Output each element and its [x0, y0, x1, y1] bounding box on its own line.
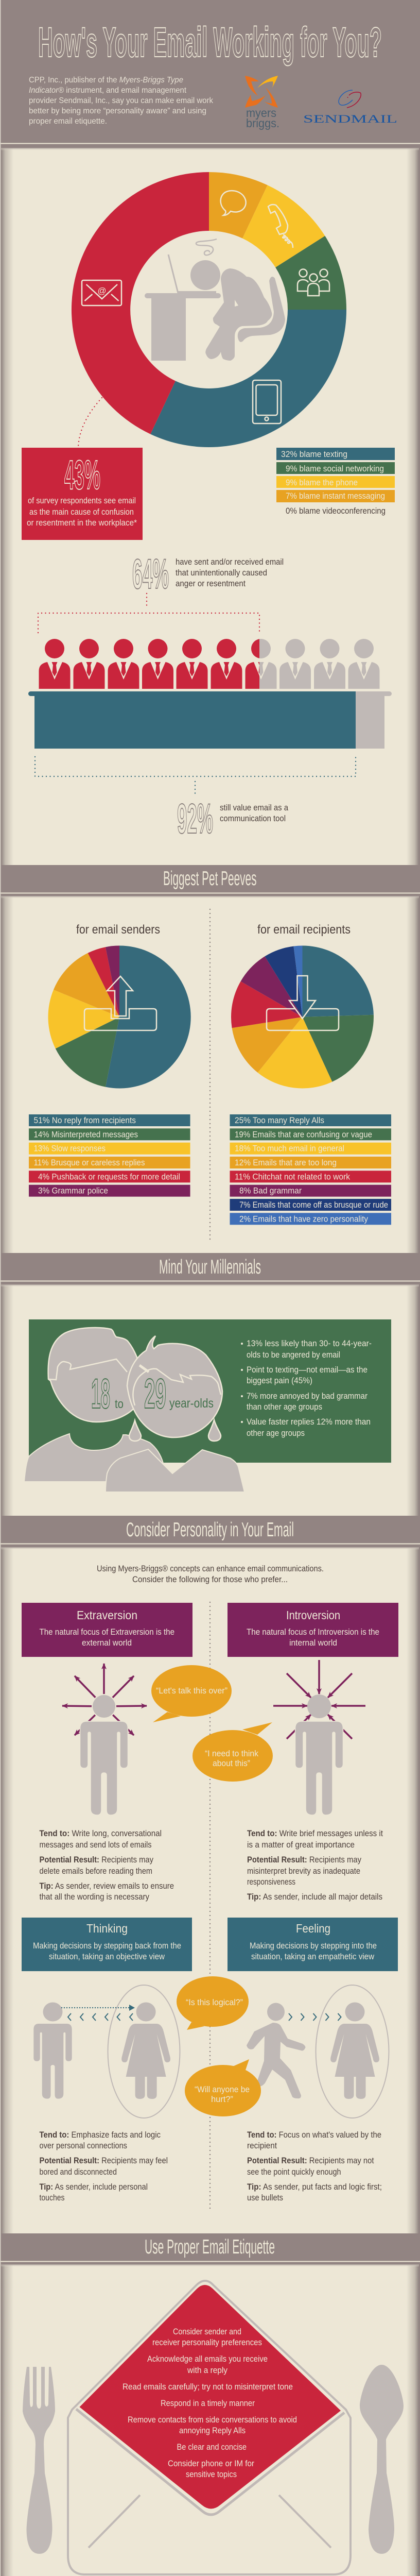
card: feeling: Feeling [296, 1922, 330, 1935]
intro text: CPP, Inc., publisher of the Myers-Briggs Type [29, 76, 183, 84]
text: introversion details [247, 1828, 383, 1902]
donut chart [72, 172, 346, 447]
diamond: etiquette tips: Respond in a timely manner [161, 2398, 255, 2408]
legend: what respondents blame [276, 448, 395, 516]
stat: 64%: that unintentionally caused [176, 568, 267, 578]
text: feeling details: recipient [247, 2141, 277, 2150]
legend: senders: 11% Brusque or careless replies [34, 1158, 145, 1167]
text: thinking details: touches [39, 2193, 65, 2202]
row of ten people pictogram [39, 639, 380, 689]
text: feeling details: Tend to: Focus on what's valued by the [247, 2130, 381, 2140]
text: extraversion details: messages and send lots of emails [39, 1840, 151, 1850]
legend: recipients: 11% Chitchat not related to work [235, 1172, 350, 1181]
speech bubble: let's talk this over [151, 1665, 232, 1722]
text: introversion details: Potential Result: Recipients may [247, 1855, 361, 1865]
label: 18 to 29 year-olds: 29 [144, 1370, 166, 1417]
diamond: etiquette tips: Remove contacts from side conversations to avoid [128, 2415, 297, 2425]
intro text: better by being more “personality aware” and using [29, 107, 206, 115]
legend: senders: 51% No reply from recipients [34, 1115, 136, 1125]
legend: senders: 13% Slow responses [34, 1144, 106, 1154]
icon: envelope [68, 2281, 351, 2574]
icon: envelope: @ [97, 286, 107, 296]
speech bubble: will anyone be hurt: hurt?” [211, 2094, 233, 2104]
callout: 43% box: or resentment in the workplace* [27, 518, 137, 528]
text: feeling details: see the point quickly enough [247, 2167, 341, 2177]
speech bubble: will anyone be hurt [185, 2059, 261, 2116]
legend: recipients: 2% Emails that have zero personality [239, 1214, 368, 1224]
card: introversion [227, 1603, 398, 1657]
figure: extravert with outward arrows [62, 1664, 147, 1815]
text: extraversion details: Potential Result: Recipients may [39, 1855, 153, 1865]
label: 18 to 29 year-olds: to [115, 1397, 124, 1411]
speech bubble: I need to think about this [192, 1722, 273, 1782]
stat: 64%: have sent and/or received email [176, 557, 284, 567]
diamond: etiquette tips: annoying Reply Alls [179, 2426, 246, 2435]
icon: download arrow and tray [267, 976, 339, 1030]
pie chart: recipients [231, 946, 374, 1088]
text: thinking details: Tend to: Emphasize facts and logic [39, 2130, 161, 2140]
diamond: etiquette tips: with a reply [187, 2365, 227, 2375]
text: introversion details: responsiveness [247, 1877, 295, 1887]
logo: myers briggs [245, 76, 279, 130]
card: feeling: Making decisions by stepping into the [250, 1941, 377, 1951]
callout: 43% box: as the main cause of confusion [29, 507, 134, 517]
text: thinking details: bored and disconnected [39, 2167, 117, 2177]
diamond: etiquette tips: sensitive topics [186, 2469, 237, 2479]
text: millennial facts: Point to texting—not email—as the [247, 1365, 367, 1375]
speech bubble: I need to think about this: about this” [213, 1758, 250, 1768]
card: extraversion: Extraversion [77, 1608, 137, 1622]
header band [29, 19, 397, 130]
figure: feeling man walking into woman's situation [247, 1985, 389, 2118]
legend: recipients: 8% Bad grammar [239, 1186, 302, 1196]
intro text: Consider the following for those who prefer... [132, 1574, 288, 1584]
legend: recipients [230, 1114, 391, 1225]
text: introversion details: misinterpret brevity as inadequate [247, 1866, 360, 1876]
card: extraversion [22, 1603, 192, 1657]
dotted connector: donut to 43% box [78, 398, 102, 447]
heading: consider personality [1, 1516, 419, 1543]
illustration: two millennial faces [24, 1328, 244, 1492]
heading: use proper email etiquette: Use Proper Email Etiquette [145, 2236, 275, 2258]
heading: mind your millennials: Mind Your Millennials [159, 1256, 261, 1278]
dotted bracket: 92% [35, 756, 356, 796]
text: thinking details: Tip: As sender, include personal [39, 2182, 148, 2192]
card: introversion: The natural focus of Introversion is the [247, 1627, 379, 1637]
panel: personality [1, 1547, 419, 2233]
intro text: provider Sendmail, Inc., say you can make email work [29, 96, 214, 105]
text: millennial facts: than other age groups [247, 1402, 322, 1412]
text: feeling details: use bullets [247, 2193, 283, 2202]
panel: pet peeves [1, 896, 419, 1253]
figure: thinking man stepping back from woman [33, 1985, 180, 2118]
text: extraversion details: that all the wording is necessary [39, 1892, 149, 1902]
diamond: etiquette tips: Consider sender and [173, 2327, 241, 2336]
callout: 43% box: 43% [64, 452, 100, 498]
text: feeling details: Tip: As sender, put facts and logic first; [247, 2182, 382, 2192]
text: feeling details: Potential Result: Recipients may not [247, 2156, 374, 2165]
intro text [97, 1564, 324, 1584]
legend: what respondents blame: 9% blame the phone [286, 478, 358, 487]
desk bar: 92% value email [28, 691, 392, 749]
text: introversion details: is a matter of great importance [247, 1840, 355, 1850]
intro text [29, 76, 214, 126]
intro text: Using Myers-Briggs® concepts can enhance email communications. [97, 1564, 324, 1573]
heading: mind your millennials [1, 1253, 419, 1280]
text: millennial facts: other age groups [247, 1428, 305, 1438]
speech bubble: is this logical: “Is this logical?” [186, 1997, 243, 2007]
legend: what respondents blame: 32% blame texting [281, 449, 347, 459]
stat: 64%: anger or resentment [176, 579, 246, 588]
heading: for email senders: for email senders [76, 923, 160, 937]
text: introversion details: Tip: As sender, include all major details [247, 1892, 382, 1902]
intro text: proper email etiquette. [29, 117, 107, 126]
heading: for email recipients: for email recipients [257, 923, 351, 937]
legend: what respondents blame: 7% blame instant messaging [286, 491, 385, 501]
icon: stressed worker at desk [145, 239, 285, 361]
diamond: etiquette tips: Read emails carefully; try not to misinterpret tone [122, 2382, 293, 2392]
heading: biggest pet peeves [1, 865, 419, 892]
heading: biggest pet peeves: Biggest Pet Peeves [163, 868, 256, 890]
icon: speech bubble [221, 191, 246, 215]
card: thinking: Thinking [86, 1922, 128, 1935]
card: thinking [22, 1918, 192, 1971]
text: thinking details: Potential Result: Recipients may feel [39, 2156, 168, 2165]
speech bubble: is this logical [177, 1976, 249, 2030]
text: millennial facts: 7% more annoyed by bad grammar [247, 1391, 367, 1401]
green card [29, 1319, 391, 1463]
card: feeling: situation, taking an empathetic view [251, 1952, 375, 1961]
diamond: etiquette tips: Consider phone or IM for [168, 2459, 254, 2468]
text: millennial facts: olds to be angered by email [247, 1350, 340, 1360]
callout: 43% box [22, 448, 143, 540]
icon: fork [23, 2367, 55, 2554]
diamond: etiquette tips: Acknowledge all emails you receive [147, 2354, 268, 2364]
card: extraversion: external world [82, 1638, 132, 1648]
label: 18 to 29 year-olds: 18 [91, 1370, 110, 1417]
legend: recipients: 12% Emails that are too long [235, 1158, 337, 1167]
diamond: etiquette tips [79, 2285, 341, 2509]
text: millennial facts: biggest pain (45%) [247, 1376, 312, 1385]
diamond: etiquette tips: receiver personality preferences [152, 2337, 262, 2347]
diamond: etiquette tips: Be clear and concise [177, 2442, 247, 2452]
legend: what respondents blame: 0% blame videoconferencing [286, 506, 386, 516]
callout: 43% box: of survey respondents see email [28, 496, 136, 505]
legend: what respondents blame: 9% blame social networking [286, 464, 384, 473]
text: thinking details [39, 2130, 168, 2202]
logo: sendmail: SENDMAIL [303, 112, 397, 125]
panel: etiquette [1, 2264, 419, 2576]
speech bubble: I need to think about this: “I need to think [205, 1749, 258, 1758]
speech bubble: let's talk this over: “Let's talk this over” [156, 1686, 227, 1696]
card: feeling [227, 1918, 398, 1971]
icon: envelope [82, 280, 121, 306]
text: millennial facts: 13% less likely than 30- to 44-year- [247, 1338, 372, 1348]
legend: recipients: 7% Emails that come off as brusque or rude [239, 1200, 388, 1210]
legend: senders: 14% Misinterpreted messages [34, 1129, 138, 1139]
text: millennial facts [241, 1338, 372, 1438]
legend: senders: 3% Grammar police [38, 1186, 108, 1196]
icon: telephone [268, 205, 293, 248]
dotted bracket: 64% [38, 594, 259, 633]
icon: spoon [360, 2365, 404, 2554]
text: introversion details: Tend to: Write brief messages unless it [247, 1828, 383, 1838]
logo: sendmail [303, 90, 397, 125]
card: thinking: situation, taking an objective view [49, 1952, 165, 1961]
text: thinking details: over personal connections [39, 2141, 127, 2150]
figure: introvert with inward arrows [273, 1660, 365, 1815]
text: feeling details [247, 2130, 382, 2202]
label: 18 to 29 year-olds [91, 1370, 214, 1417]
icon: upload arrow and tray [84, 976, 156, 1030]
stat: 64%: 64% [132, 551, 169, 598]
logo: myers briggs: briggs. [246, 116, 279, 130]
panel: millennials [1, 1284, 419, 1516]
intro text: Indicator® instrument, and email management [29, 86, 187, 95]
text: millennial facts: Value faster replies 12% more than [247, 1417, 371, 1427]
logo: myers briggs: myers [246, 106, 276, 120]
legend: recipients: 19% Emails that are confusing or vague [235, 1129, 372, 1139]
text: extraversion details [39, 1828, 174, 1902]
legend: senders [29, 1114, 190, 1197]
text: extraversion details: Tend to: Write long, conversational [39, 1828, 162, 1838]
card: thinking: Making decisions by stepping back from the [33, 1941, 181, 1951]
stat: 92%: communication tool [220, 814, 286, 823]
card: introversion: Introversion [286, 1608, 340, 1622]
legend: recipients: 18% Too much email in general [235, 1144, 344, 1154]
card: extraversion: The natural focus of Extraversion is the [39, 1627, 174, 1637]
pie chart: senders [48, 945, 191, 1088]
heading: use proper email etiquette [1, 2233, 419, 2261]
text: extraversion details: delete emails before reading them [39, 1866, 152, 1876]
legend: senders: 4% Pushback or requests for more detail [38, 1172, 180, 1181]
card: introversion: internal world [289, 1638, 337, 1648]
icon: tablet [253, 380, 281, 423]
panel: email survey stats [1, 148, 419, 865]
speech bubble: will anyone be hurt: “Will anyone be [195, 2084, 250, 2094]
stat: 64% [132, 551, 284, 598]
icon: people [297, 269, 329, 296]
stat: 92%: 92% [177, 795, 213, 842]
legend: recipients: 25% Too many Reply Alls [235, 1115, 324, 1125]
text: extraversion details: Tip: As sender, review emails to ensure [39, 1881, 174, 1891]
stat: 92%: still value email as a [220, 803, 288, 812]
label: 18 to 29 year-olds: year-olds [169, 1396, 214, 1411]
